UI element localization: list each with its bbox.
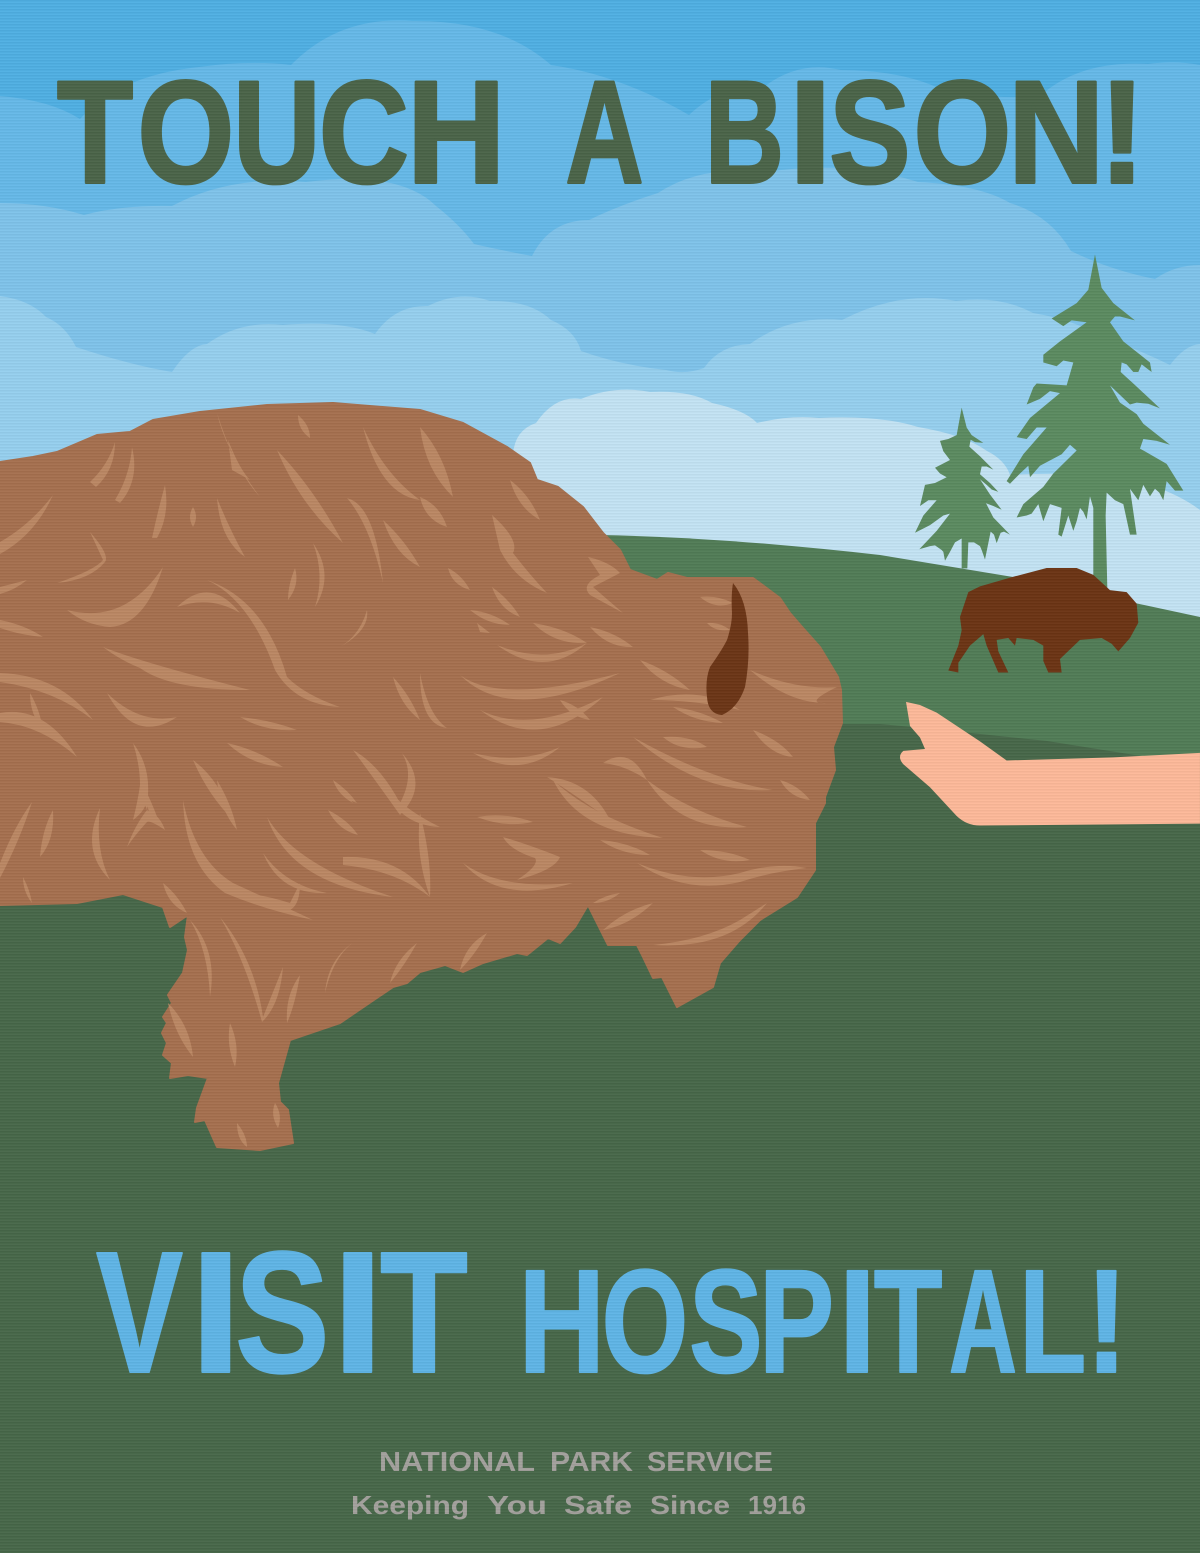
large bison <box>0 403 842 1150</box>
footer: tagline: Since <box>650 1490 730 1520</box>
title: touch a bison: H <box>407 50 506 214</box>
footer: tagline: Safe <box>564 1490 632 1520</box>
footer: tagline: You <box>487 1490 547 1520</box>
title: touch a bison: N <box>1008 50 1104 214</box>
bison body <box>0 403 842 1150</box>
title: touch a bison: B <box>705 50 784 214</box>
title: touch a bison: ! <box>1099 50 1146 214</box>
footer: tagline: 1916 <box>748 1490 806 1520</box>
heading: hospital: T <box>874 1240 942 1404</box>
icon: small pine tree <box>915 408 1010 568</box>
heading: hospital: I <box>838 1240 876 1404</box>
heading: visit: T <box>380 1215 468 1409</box>
title: touch a bison: O <box>914 50 1011 214</box>
hill <box>600 535 1200 780</box>
icon: large pine tree <box>1007 255 1183 588</box>
heading: visit: V <box>96 1215 183 1409</box>
fur streaks <box>0 413 837 1147</box>
icon: outstretched hand <box>900 702 1200 826</box>
footer: national park service <box>379 1446 773 1477</box>
title: touch a bison: I <box>788 50 832 214</box>
heading: visit <box>96 1215 468 1409</box>
title: touch a bison: U <box>233 50 321 214</box>
title: touch a bison: T <box>57 50 133 214</box>
title: touch a bison: S <box>829 50 910 214</box>
footer: national park service: SERVICE <box>647 1446 773 1477</box>
foreground ground <box>0 724 1200 1553</box>
heading: hospital: P <box>759 1240 834 1404</box>
title: touch a bison: A <box>566 50 644 214</box>
heading: hospital: A <box>949 1240 1017 1404</box>
title: touch a bison: C <box>319 50 409 214</box>
footer: national park service: NATIONAL <box>379 1446 535 1477</box>
sky background <box>0 0 1200 660</box>
heading: hospital <box>519 1240 1128 1404</box>
heading: hospital: H <box>519 1240 605 1404</box>
heading: hospital: ! <box>1086 1240 1128 1404</box>
icon: distant bison <box>948 568 1138 672</box>
footer: tagline <box>351 1490 806 1520</box>
heading: visit: S <box>235 1215 330 1409</box>
footer: national park service: PARK <box>550 1446 633 1477</box>
heading: hospital: L <box>1019 1240 1086 1404</box>
title: touch a bison: O <box>138 50 234 214</box>
footer: tagline: Keeping <box>351 1490 469 1520</box>
heading: hospital: O <box>602 1240 688 1404</box>
title: touch a bison <box>57 50 1146 214</box>
horn <box>706 583 749 715</box>
heading: visit: I <box>190 1215 242 1409</box>
heading: visit: I <box>332 1215 384 1409</box>
heading: hospital: S <box>689 1240 763 1404</box>
